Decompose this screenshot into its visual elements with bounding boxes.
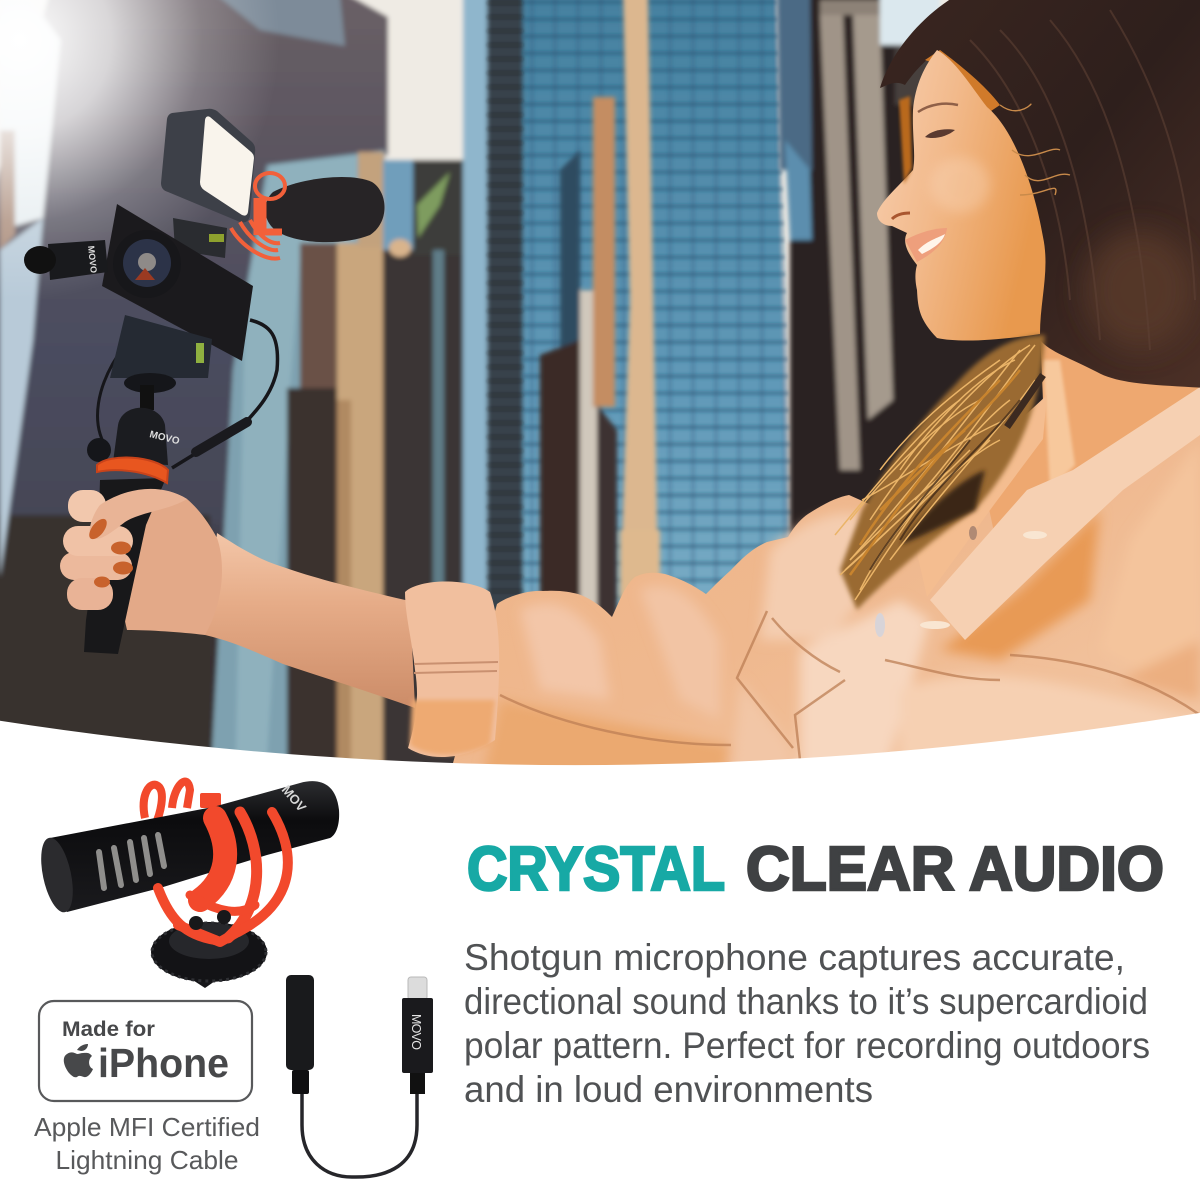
bright facade of left building <box>0 0 60 230</box>
phone cage <box>110 315 212 378</box>
neck <box>985 330 1200 560</box>
microphone tube <box>49 781 339 912</box>
product photo: shotgun microphone <box>35 781 339 988</box>
hair strands <box>970 10 1195 350</box>
orange rear loops <box>144 782 190 825</box>
body text <box>464 937 1150 1110</box>
thumb <box>90 489 187 539</box>
body text: directional sound thanks to it’s supercardioid <box>464 981 1148 1022</box>
cheek highlight <box>930 157 990 213</box>
camera rig <box>24 109 384 654</box>
heading: CLEAR AUDIO <box>746 835 1164 904</box>
body text: and in loud environments <box>464 1069 873 1110</box>
collar <box>910 387 1200 640</box>
caption: MFI certification <box>34 1112 260 1175</box>
right building columns <box>790 0 1060 550</box>
silver slots <box>99 835 164 888</box>
cable right <box>172 320 278 468</box>
cuff <box>405 582 499 757</box>
screws <box>189 916 203 930</box>
hair highlight <box>925 50 1000 115</box>
orange ring <box>97 458 168 483</box>
nostril <box>892 213 910 219</box>
heading: CRYSTAL <box>467 835 725 904</box>
caption: MFI certification: Apple MFI Certified <box>34 1112 260 1142</box>
foam microphone <box>265 177 384 242</box>
jacket light and shadow areas <box>480 440 1200 800</box>
hand fingers and thumb <box>60 489 187 610</box>
cable left <box>98 345 125 450</box>
lower brown block <box>0 515 210 795</box>
hand palm <box>100 490 222 635</box>
face <box>877 50 1045 341</box>
arm <box>205 533 415 708</box>
LED light <box>161 109 255 222</box>
reflections and right columns <box>540 0 1060 620</box>
dark building left <box>0 0 388 790</box>
hot shoe mount <box>151 922 267 988</box>
jacket seams <box>500 611 1200 760</box>
grille end <box>35 835 79 915</box>
hair <box>880 0 1200 388</box>
orange shock mount <box>231 173 285 259</box>
woman <box>205 0 1200 810</box>
phone <box>102 204 253 361</box>
lightning connector <box>402 977 433 1094</box>
body text: Shotgun microphone captures accurate, <box>464 937 1125 978</box>
small shotgun mic: MOVO <box>86 245 99 274</box>
eye <box>925 129 955 138</box>
photo background: city buildings <box>0 0 1200 810</box>
mid tower <box>210 150 468 793</box>
ball head: MOVO <box>148 429 181 447</box>
lightning connector: MOVO <box>409 1014 423 1050</box>
Made for iPhone badge <box>39 1001 252 1101</box>
buttons <box>969 526 977 540</box>
ball head <box>87 373 181 465</box>
heading <box>467 835 1164 904</box>
Made for iPhone badge: Made for <box>62 1017 156 1041</box>
blond flyaway hair <box>835 335 1045 610</box>
cylindrical glass tower <box>463 0 795 790</box>
orange front shock mount <box>158 812 288 942</box>
nails <box>86 516 133 588</box>
lightning adapter cable <box>286 975 433 1177</box>
rear mount block <box>200 793 221 808</box>
dark collar band <box>1007 375 1043 427</box>
Made for iPhone badge: iPhone <box>98 1040 229 1086</box>
icon: apple logo <box>64 1044 93 1077</box>
sun flare <box>0 0 280 300</box>
eyebrow <box>918 104 958 112</box>
3.5mm jack <box>286 975 314 1094</box>
jacket body <box>440 385 1200 810</box>
hair wisps on head <box>1000 104 1070 195</box>
small shotgun mic <box>24 240 108 280</box>
bracket <box>173 218 227 258</box>
smile <box>905 228 947 262</box>
tripod handle <box>84 478 166 654</box>
cuff warm shadow <box>410 700 495 755</box>
tower window grid <box>523 0 795 600</box>
hair lighter lower part <box>1085 230 1195 350</box>
body text: polar pattern. Perfect for recording outdoors <box>464 1025 1150 1066</box>
wide angle lens <box>113 230 181 298</box>
white lower panel with curved top edge <box>0 712 1200 1200</box>
caption: MFI certification: Lightning Cable <box>56 1145 239 1175</box>
orange temple lock <box>899 96 912 184</box>
MOVO label on mic: MOV <box>279 782 309 815</box>
